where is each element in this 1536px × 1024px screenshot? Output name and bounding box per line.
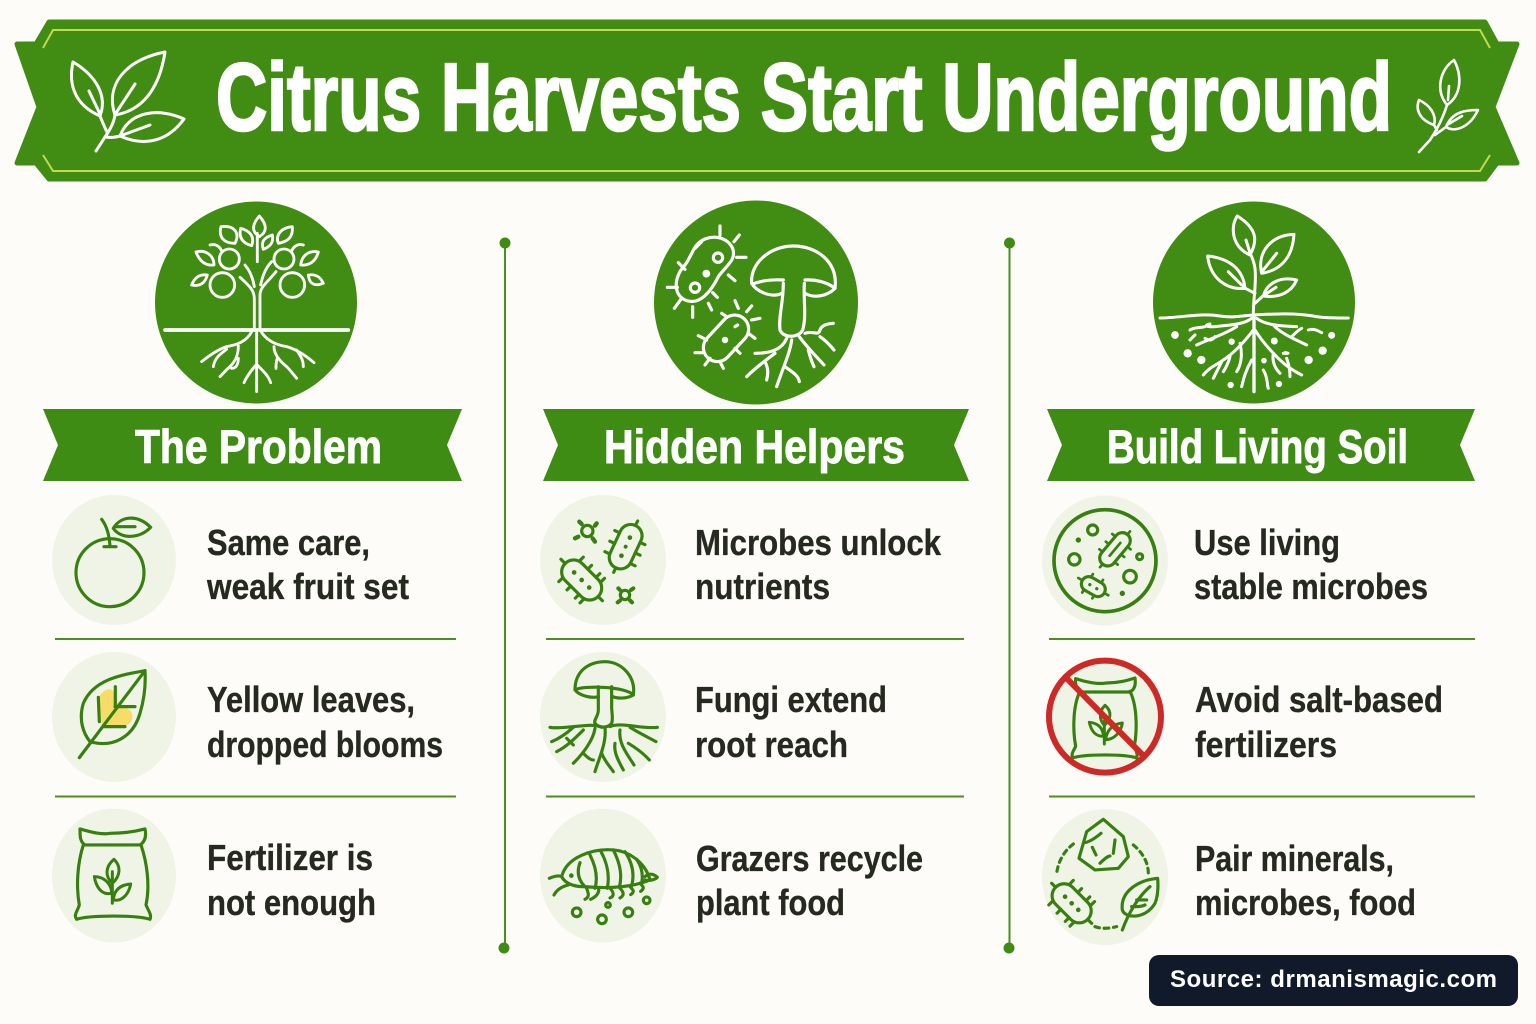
row: microbes unlock nutrients: Microbes unlock xyxy=(695,522,942,563)
row: same care: Same care, xyxy=(207,522,370,563)
heading ribbon: the problem xyxy=(43,409,462,481)
row: same care: weak fruit set xyxy=(206,566,409,607)
heading ribbon: hidden helpers xyxy=(543,409,969,481)
row: pair minerals, microbes, food xyxy=(1039,809,1416,945)
row: yellow leaves: dropped blooms xyxy=(207,724,443,765)
row: fungi extend root reach xyxy=(540,652,887,782)
heading ribbon: build living soil xyxy=(1047,409,1475,481)
row dividers xyxy=(55,639,1475,796)
heading ribbon: build living soil: Build Living Soil xyxy=(1107,420,1408,473)
row: avoid salt-based fertilizers: Avoid salt-based xyxy=(1195,679,1443,720)
row: fertilizer xyxy=(52,808,376,942)
banner inner line xyxy=(43,30,1490,171)
icon: plant with soil roots xyxy=(1153,202,1355,404)
row: same care xyxy=(52,495,409,625)
row: grazers recycle plant food xyxy=(540,808,923,942)
row: fertilizer: not enough xyxy=(207,882,376,923)
heading ribbon: the problem: The Problem xyxy=(135,420,382,473)
row: grazers recycle plant food: plant food xyxy=(696,882,845,923)
row: use living stable microbes: Use living xyxy=(1194,522,1340,563)
source badge xyxy=(1149,955,1518,1006)
row: pair minerals, microbes, food: microbes, food xyxy=(1195,882,1416,923)
row: yellow leaves: Yellow leaves, xyxy=(207,679,415,720)
icon: right sprig xyxy=(1418,60,1478,152)
row: microbes unlock nutrients: nutrients xyxy=(695,566,830,607)
panel: hidden helpers xyxy=(540,200,969,942)
row: yellow leaves xyxy=(52,652,443,782)
row: use living stable microbes xyxy=(1042,496,1428,626)
row: avoid salt-based fertilizers: fertilizers xyxy=(1195,724,1337,765)
banner ribbon xyxy=(17,22,1517,179)
row: fungi extend root reach: Fungi extend xyxy=(695,679,887,720)
icon: left leaves xyxy=(71,52,184,151)
panel: the problem xyxy=(43,202,462,942)
row: pair minerals, microbes, food: Pair minerals, xyxy=(1195,838,1394,879)
column divider right xyxy=(1004,238,1015,954)
title banner xyxy=(17,22,1517,179)
icon: citrus tree with roots xyxy=(155,202,357,404)
source badge: Source: drmanismagic.com xyxy=(1170,966,1497,993)
icon: microbes and mushroom xyxy=(654,200,858,404)
row: use living stable microbes: stable microbes xyxy=(1194,566,1428,607)
column divider left xyxy=(498,238,510,954)
row: fungi extend root reach: root reach xyxy=(695,724,848,765)
row: grazers recycle plant food: Grazers recycle xyxy=(696,838,923,879)
row: avoid salt-based fertilizers xyxy=(1046,658,1443,776)
row: fertilizer: Fertilizer is xyxy=(207,837,373,878)
row: microbes unlock nutrients xyxy=(540,495,942,625)
panel: build living soil xyxy=(1039,202,1475,945)
heading ribbon: hidden helpers: Hidden Helpers xyxy=(604,420,905,473)
